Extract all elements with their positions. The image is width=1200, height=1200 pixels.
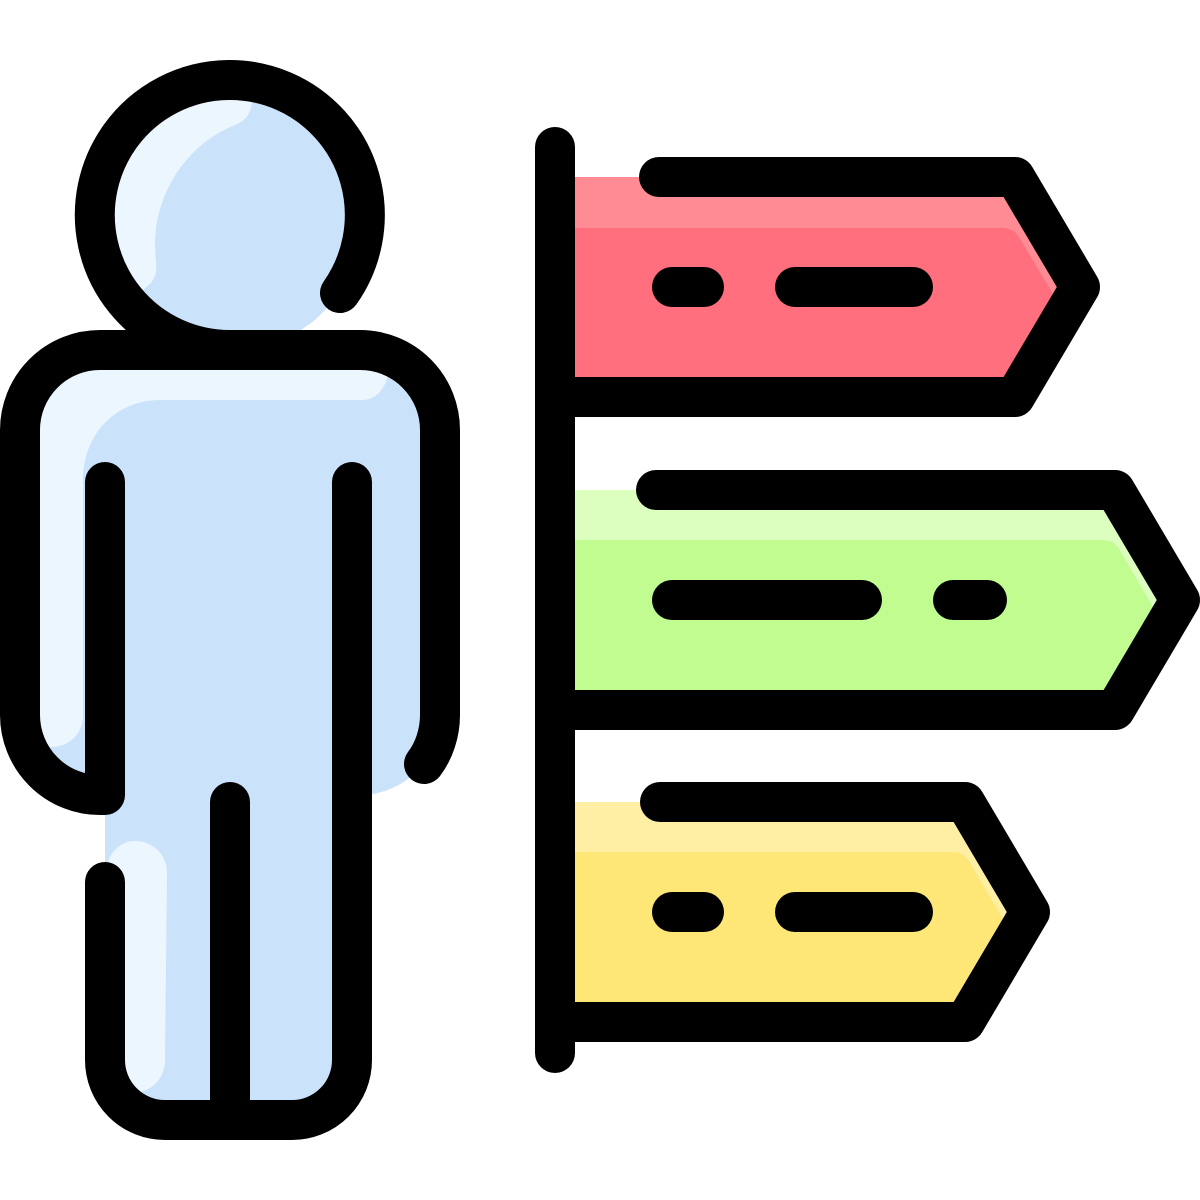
person shoulders and arms outline <box>20 350 440 795</box>
person leg divider <box>210 802 250 1120</box>
person head fill <box>115 100 345 330</box>
red sign fill <box>555 177 1080 397</box>
icon: person <box>10 80 440 1120</box>
signpost pole <box>535 147 575 1053</box>
yellow sign fill <box>555 802 1030 1022</box>
green sign long dash <box>672 580 862 620</box>
yellow sign outline <box>555 802 1030 1022</box>
green sign fill <box>555 490 1180 710</box>
person torso and legs outline <box>105 482 352 1120</box>
panel: green arrow sign <box>555 490 1180 710</box>
red sign short dash <box>672 267 704 307</box>
yellow sign short dash <box>672 892 704 932</box>
person head outline <box>95 80 365 350</box>
person body fill <box>40 370 420 1100</box>
green sign outline <box>555 490 1180 710</box>
panel: yellow arrow sign <box>555 802 1030 1022</box>
yellow sign long dash <box>795 892 913 932</box>
red sign outline <box>555 177 1080 397</box>
panel: red arrow sign <box>555 177 1080 397</box>
green sign short dash <box>953 580 987 620</box>
red sign long dash <box>795 267 913 307</box>
